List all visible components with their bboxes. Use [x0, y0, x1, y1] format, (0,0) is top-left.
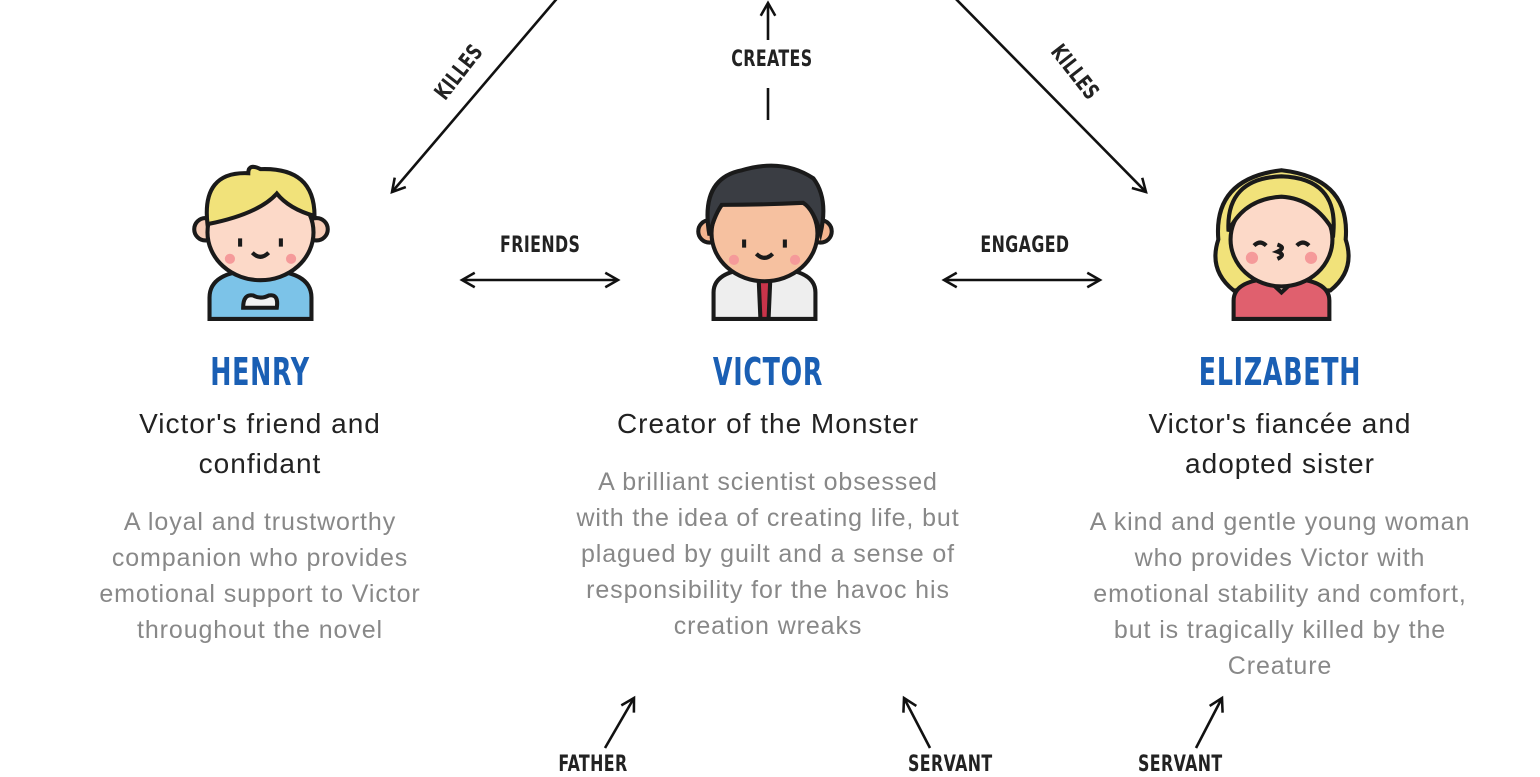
description: elizabeth: but is tragically killed by the: [1114, 616, 1446, 644]
arrow: creates: [767, 3, 769, 120]
subtitle: henry: [139, 408, 381, 479]
description: henry: A loyal and trustworthy: [124, 508, 396, 536]
arrow: servant 1: [904, 698, 930, 748]
heading: victor: VICTOR: [713, 350, 823, 394]
subtitle: henry: confidant: [199, 448, 321, 479]
label: father: FATHER: [558, 752, 628, 777]
label: servant 1: SERVANT: [908, 752, 993, 777]
subtitle: elizabeth: [1148, 408, 1411, 479]
description: victor: with the idea of creating life, but: [576, 504, 960, 532]
panel: henry: [99, 350, 421, 644]
description: victor: creation wreaks: [674, 612, 862, 640]
description: victor: responsibility for the havoc his: [586, 576, 950, 604]
panel: elizabeth: [1090, 350, 1470, 680]
subtitle: elizabeth: adopted sister: [1185, 448, 1375, 479]
icon: victor avatar: [696, 164, 834, 321]
subtitle: elizabeth: Victor's fiancée and: [1148, 408, 1411, 439]
subtitle: henry: Victor's friend and: [139, 408, 381, 439]
arrow: friends: [462, 279, 618, 281]
label: kills left: KILLES: [430, 40, 489, 105]
panel: victor: [576, 350, 960, 640]
label: engaged: ENGAGED: [980, 233, 1069, 258]
description: elizabeth: who provides Victor with: [1135, 544, 1425, 572]
description: elizabeth: A kind and gentle young woman: [1090, 508, 1470, 536]
arrow: kills henry: [392, 0, 560, 192]
description: elizabeth: Creature: [1228, 652, 1332, 680]
arrow: servant 2: [1196, 698, 1222, 748]
description: henry: companion who provides: [112, 544, 408, 572]
description: victor: [576, 468, 960, 640]
heading: henry: HENRY: [210, 350, 310, 394]
description: henry: [99, 508, 421, 644]
label: kills right: KILLES: [1045, 40, 1104, 105]
icon: elizabeth avatar: [1213, 168, 1351, 321]
description: henry: emotional support to Victor: [99, 580, 421, 608]
icon: henry avatar: [192, 164, 330, 321]
label: friends: FRIENDS: [500, 233, 580, 258]
label: creates: CREATES: [731, 47, 813, 72]
heading: elizabeth: ELIZABETH: [1199, 350, 1361, 394]
description: henry: throughout the novel: [137, 616, 383, 644]
subtitle: victor: Creator of the Monster: [617, 408, 919, 439]
description: victor: plagued by guilt and a sense of: [581, 540, 955, 568]
description: victor: A brilliant scientist obsessed: [598, 468, 938, 496]
description: elizabeth: emotional stability and comfort,: [1093, 580, 1467, 608]
arrow: engaged: [944, 279, 1100, 281]
arrow: father: [605, 698, 634, 748]
description: elizabeth: [1090, 508, 1470, 680]
label: servant 2: SERVANT: [1138, 752, 1223, 777]
arrow: kills elizabeth: [952, 0, 1146, 192]
